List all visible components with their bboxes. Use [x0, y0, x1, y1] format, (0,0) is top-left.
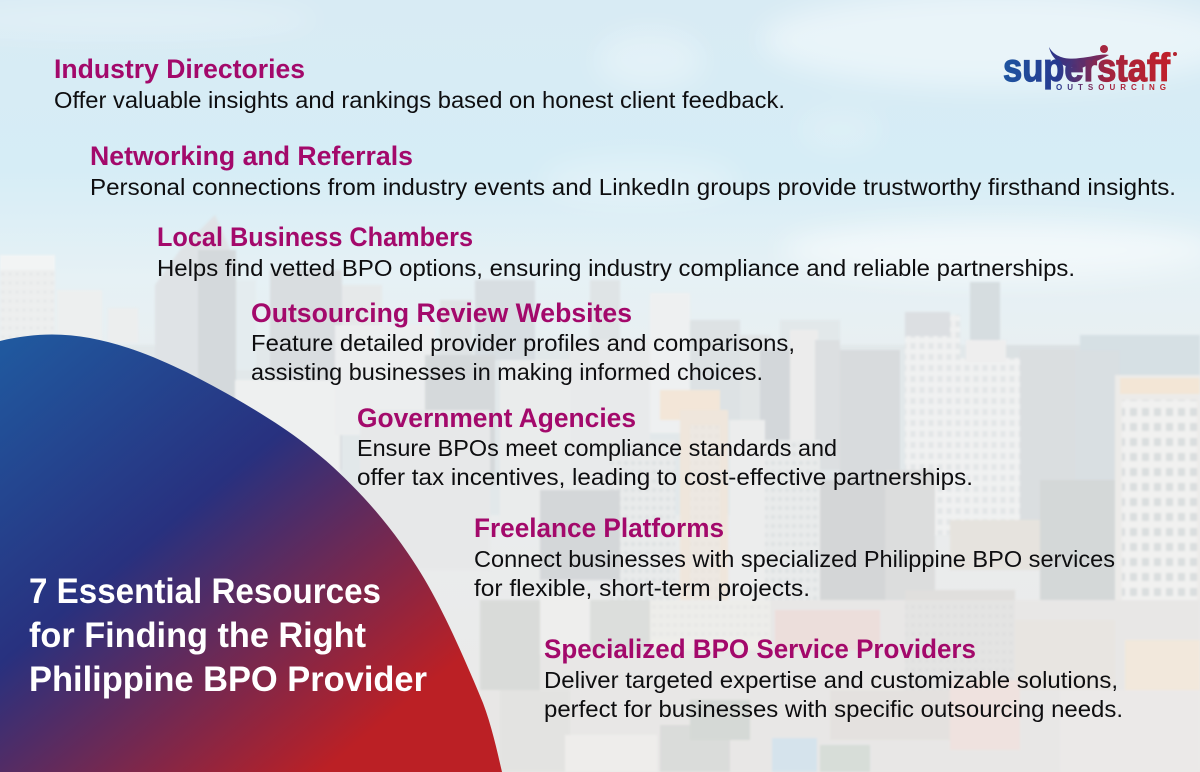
- heading: Local Business Chambers: [157, 222, 473, 252]
- logo: SuperStaff Outsourcing: superstaff: [1003, 47, 1171, 90]
- description: Personal connections from industry events and LinkedIn groups provide trustworthy firsthand insights.: [90, 174, 1176, 200]
- heading: Outsourcing Review Websites: [251, 298, 632, 328]
- heading: Freelance Platforms: [474, 513, 724, 543]
- title: Philippine BPO Provider: [29, 660, 427, 699]
- resource: Freelance Platforms: [474, 513, 1115, 601]
- panel: gradient title shape: [0, 334, 502, 772]
- title: [29, 572, 427, 699]
- lower centre blocks: [360, 410, 490, 570]
- heading: Industry Directories: [54, 54, 305, 84]
- heading: Government Agencies: [357, 403, 636, 433]
- description: Deliver targeted expertise and customizable solutions,: [544, 667, 1118, 693]
- resource: Industry Directories: [54, 54, 785, 113]
- resource: Government Agencies: [357, 403, 973, 490]
- description: Connect businesses with specialized Philippine BPO services: [474, 546, 1115, 572]
- resource: Specialized BPO Service Providers: [544, 634, 1123, 722]
- title: for Finding the Right: [29, 616, 366, 655]
- distant skyline: [0, 320, 1200, 515]
- description: perfect for businesses with specific outsourcing needs.: [544, 696, 1123, 722]
- heading: Specialized BPO Service Providers: [544, 634, 976, 664]
- logo: SuperStaff Outsourcing: OUTSOURCING: [1056, 83, 1166, 92]
- background: city skyline: [0, 215, 1200, 772]
- mid buildings: [0, 255, 55, 345]
- description: [251, 330, 795, 385]
- title: 7 Essential Resources: [29, 572, 381, 611]
- heading: Networking and Referrals: [90, 141, 413, 171]
- description: for flexible, short-term projects.: [474, 575, 810, 601]
- resource: Local Business Chambers: [157, 222, 1075, 281]
- description: Offer valuable insights and rankings based on honest client feedback.: [54, 87, 785, 113]
- description: [544, 667, 1123, 722]
- description: Feature detailed provider profiles and comparisons,: [251, 330, 795, 356]
- description: Ensure BPOs meet compliance standards and: [357, 435, 837, 461]
- right tower: [1115, 375, 1200, 660]
- description: assisting businesses in making informed choices.: [251, 359, 763, 385]
- resource: Outsourcing Review Websites: [251, 298, 795, 385]
- description: [474, 546, 1115, 601]
- low foreground blocks: [480, 600, 1200, 772]
- resource: Networking and Referrals: [90, 141, 1176, 200]
- description: [357, 435, 973, 490]
- description: offer tax incentives, leading to cost-effective partnerships.: [357, 464, 973, 490]
- description: Helps find vetted BPO options, ensuring industry compliance and reliable partnerships.: [157, 255, 1075, 281]
